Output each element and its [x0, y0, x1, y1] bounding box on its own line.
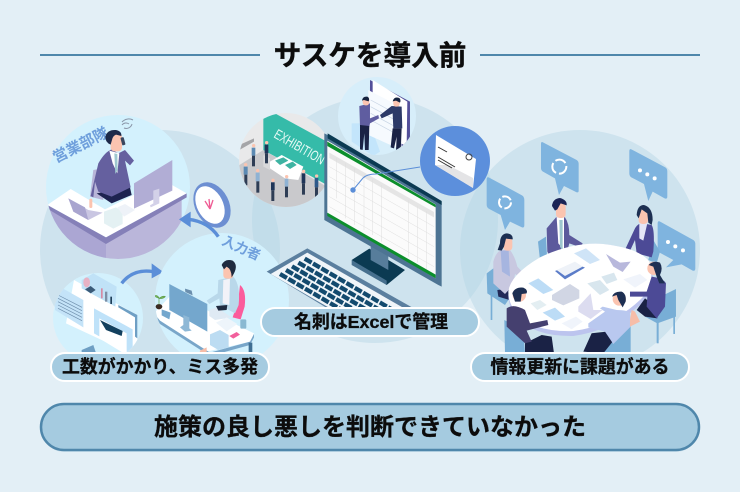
speech bubble — [629, 149, 667, 201]
speech bubble — [487, 177, 524, 230]
panel: exhibition illustration — [239, 113, 324, 207]
panel: input person illustration — [155, 233, 289, 354]
icon: phone signal — [122, 119, 133, 128]
panel: sales department illustration — [43, 115, 190, 263]
label pill: right: 情報更新に課題がある — [491, 356, 669, 377]
background circle: centre — [252, 97, 498, 343]
conclusion banner — [41, 404, 699, 452]
icon: clock — [186, 176, 238, 234]
person: front left man — [507, 288, 554, 353]
label pill: centre: 名刺はExcelで管理 — [294, 311, 448, 332]
title: サスケを導入前 — [274, 40, 466, 71]
label: sales department: 営業部隊 — [50, 123, 111, 167]
monitor stand — [352, 243, 405, 285]
conclusion banner: 施策の良し悪しを判断できていなかった — [154, 414, 586, 441]
arrow: paper to input person — [122, 263, 163, 283]
arrow: clock to sales — [179, 212, 218, 237]
label: input person: 入力者 — [220, 232, 263, 263]
person: back centre man — [546, 198, 583, 254]
label pill: centre — [261, 308, 479, 336]
meeting table — [508, 244, 653, 336]
panel: business card — [420, 126, 490, 196]
speech bubble — [541, 142, 579, 195]
background circle: right — [460, 130, 700, 370]
panel: paper documents illustration — [53, 273, 143, 352]
label pill: left — [51, 353, 269, 381]
background circle: left — [40, 130, 280, 370]
panel: meeting illustration — [487, 142, 695, 353]
label: exhibition sign: EXHIBITION — [272, 126, 328, 168]
connector line with dot — [350, 167, 420, 193]
documents on table — [528, 248, 647, 329]
person: right woman — [630, 262, 666, 327]
person: front right man — [583, 292, 631, 353]
person: back left woman — [493, 233, 521, 300]
label pill: right — [471, 353, 689, 381]
spreadsheet screen — [327, 141, 436, 278]
panel: monitor with Excel sheet — [324, 133, 442, 287]
label pill: left: 工数がかかり、ミス多発 — [62, 356, 258, 377]
panel: handshake illustration — [338, 77, 416, 156]
monitor frame — [324, 133, 442, 287]
person: back right woman — [623, 205, 654, 257]
panel: keyboard — [266, 248, 412, 307]
speech bubble — [658, 221, 695, 271]
desk with sales person — [43, 130, 187, 263]
chairs — [487, 237, 676, 353]
